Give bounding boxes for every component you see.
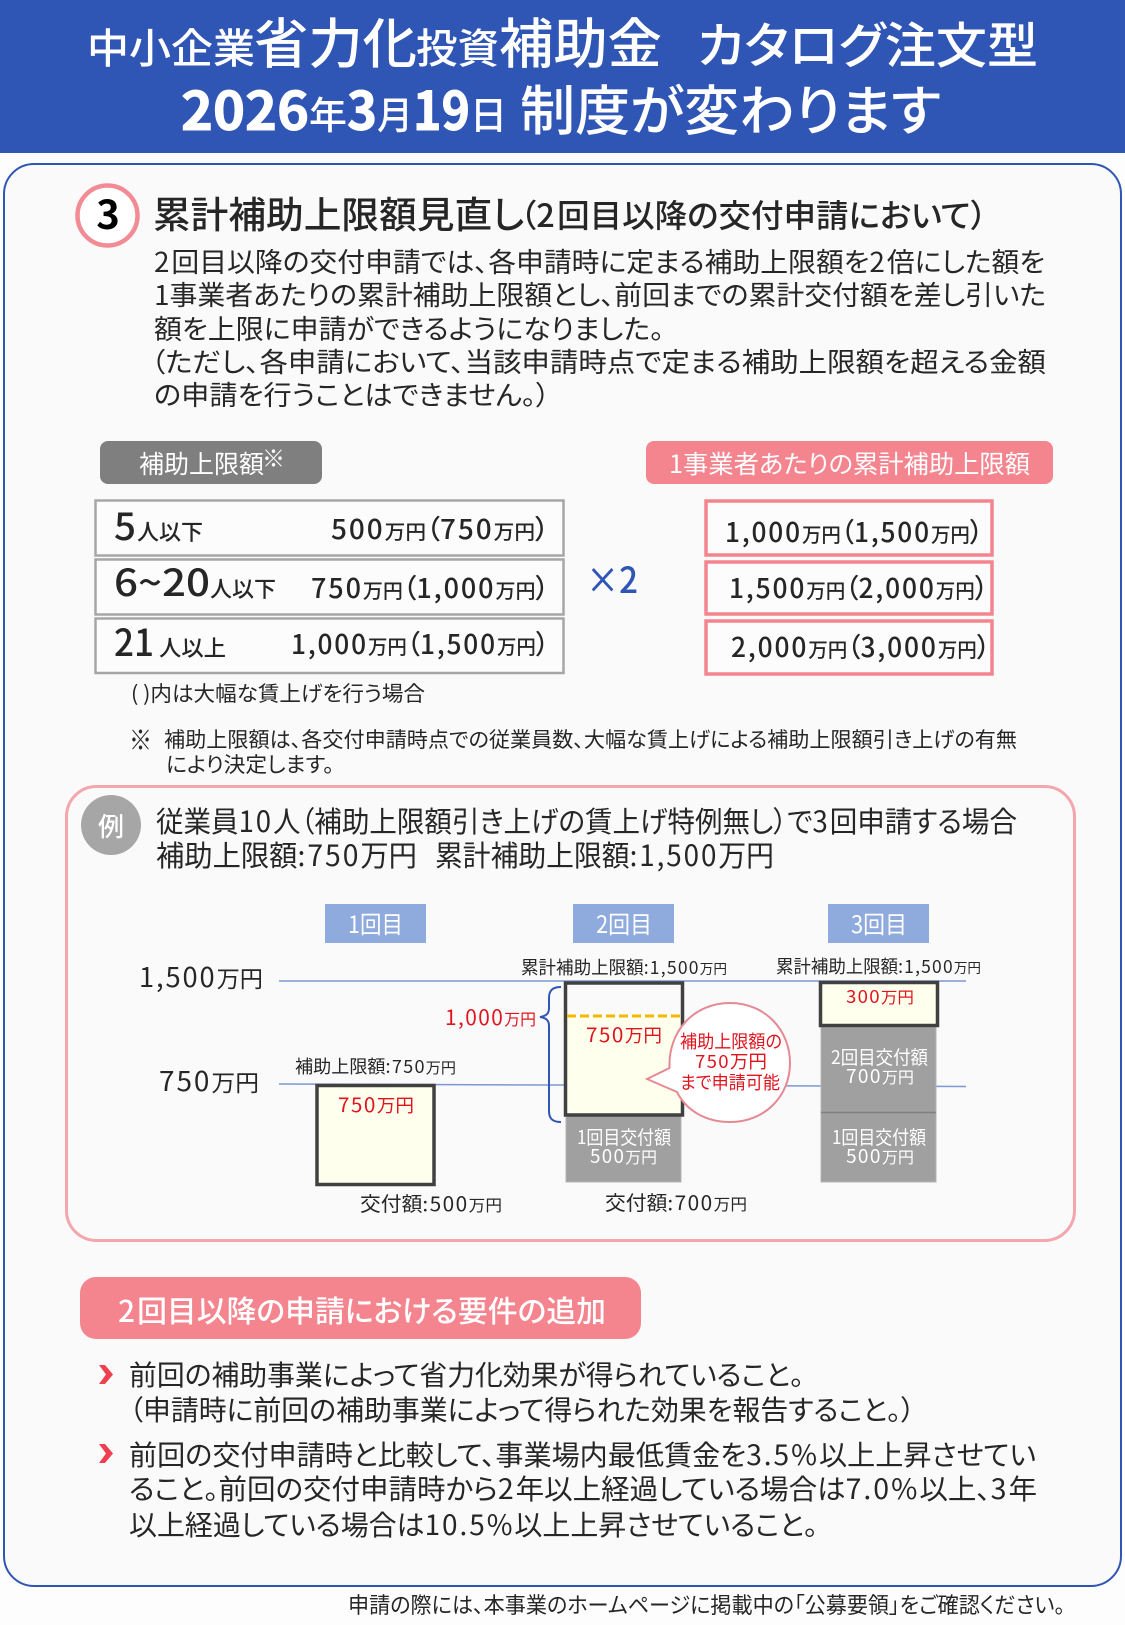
label: subsidy cap: ※ (262, 439, 285, 474)
footnote (129, 719, 1017, 779)
table: cumulative cap: 2,000万円（3,000万円） (731, 626, 990, 665)
row: 6 to 20 people: 750万円（1,000万円） (311, 567, 549, 606)
footer note: 申請の際には、本事業のホームページに掲載中の「公募要領」をご確認ください。 (348, 1588, 1065, 1620)
table: subsidy cap by employees (96, 497, 564, 673)
row: 6 to 20 people: 6~20 (114, 553, 210, 607)
intro text block: 1事業者あたりの累計補助上限額とし、前回までの累計交付額を差し引いた (154, 274, 1046, 313)
round 1 bar: 交付額:500万円 (360, 1188, 502, 1217)
axis label 750: 750万円 (159, 1060, 259, 1099)
icon: example badge (81, 795, 141, 855)
round 2 tag: 2回目 (596, 905, 652, 940)
callout bubble: 補助上限額の (680, 1028, 782, 1054)
round 2 bar: 500万円 (590, 1142, 657, 1169)
example heading: 累計補助上限額:1,500万円 (435, 833, 774, 875)
section number badge: 3 (96, 183, 120, 241)
row: 5 people or fewer: 5 (114, 497, 136, 551)
example heading: 従業員10人（補助上限額引き上げの賃上げ特例無し）で3回申請する場合 (156, 799, 1017, 841)
row: 5 people or fewer: 500万円（750万円） (331, 508, 549, 547)
round 3 bar: 2回目交付額 (831, 1043, 928, 1070)
round 2 tag (573, 904, 674, 943)
title line 2: 年 (309, 85, 347, 140)
requirement 1 (99, 1354, 915, 1429)
requirements heading pill: 2回目以降の申請における要件の追加 (118, 1287, 606, 1331)
round 1 bar (295, 1053, 502, 1217)
callout bubble: 750万円 (695, 1048, 767, 1074)
round 3 bar (776, 953, 981, 1182)
requirements heading pill (80, 1277, 641, 1339)
round 1 tag: 1回目 (348, 905, 403, 940)
chart (139, 904, 981, 1217)
round 2 bar: 1回目交付額 (577, 1123, 671, 1150)
title line 1: 投資 (416, 15, 499, 75)
row: 5 people or fewer: 人以下 (137, 515, 203, 547)
round 2 bar (445, 954, 747, 1216)
section heading (153, 185, 987, 239)
table: cumulative cap (706, 501, 992, 674)
title line 1: 補助金 (499, 0, 662, 79)
row: 21 people or more: 21 (114, 613, 154, 667)
example heading (156, 799, 1017, 875)
requirement 1: 前回の補助事業によって省力化効果が得られていること。 (129, 1354, 804, 1394)
row: 5 people or fewer (114, 497, 549, 551)
title line 2: 3 (347, 70, 377, 146)
round 1 tag (325, 904, 426, 943)
requirement 2: 以上経過している場合は10.5%以上上昇させていること。 (129, 1504, 818, 1544)
intro text block: （ただし、各申請において、当該申請時点で定まる補助上限額を超える金額 (151, 341, 1046, 380)
label: cumulative cap per business: 1事業者あたりの累計補助上限額 (669, 445, 1030, 481)
section heading: 累計補助上限額見直し (153, 185, 524, 239)
brace and 1,000 label: 1,000万円 (445, 1002, 536, 1032)
requirement 2: 前回の交付申請時と比較して、事業場内最低賃金を3.5%以上上昇させてい (129, 1434, 1036, 1474)
callout bubble (647, 1003, 790, 1122)
title line 2 (181, 67, 941, 146)
requirement 2 (99, 1434, 1037, 1544)
panel: example (66, 786, 1074, 1240)
title line 2: 制度が変わります (520, 67, 941, 146)
intro text block: 2回目以降の交付申請では、各申請時に定まる補助上限額を 2倍にした額を (154, 241, 1045, 280)
title line 2: 月 (377, 85, 413, 140)
requirement 2: ること。前回の交付申請時から2年以上経過している場合は7.0%以上、3年 (129, 1468, 1037, 1508)
label: subsidy cap (100, 439, 322, 484)
round 3 bar: 500万円 (846, 1142, 914, 1169)
row: 21 people or more: 人以上 (159, 631, 226, 663)
row: 6 to 20 people: 人以下 (210, 572, 276, 604)
round 1 bar: 補助上限額:750万円 (295, 1053, 456, 1079)
row: 21 people or more (114, 613, 549, 667)
footnote: 補助上限額は、各交付申請時点での従業員数、大幅な賃上げによる補助上限額引き上げの有無 (164, 724, 1017, 754)
round 3 bar: 1回目交付額 (832, 1123, 926, 1150)
round 3 bar: 300万円 (846, 983, 914, 1009)
note: parentheses: ( )内は大幅な賃上げを行う場合 (131, 678, 425, 708)
round 3 tag (828, 904, 929, 943)
axis label 1,500: 1,500万円 (139, 956, 263, 995)
intro text block: 額を上限に申請ができるようになりました。 (154, 308, 664, 347)
title line 1: 省力化 (254, 0, 417, 79)
round 3 bar: 700万円 (846, 1062, 914, 1089)
requirement 1: （申請時に前回の補助事業によって得られた効果を報告すること。） (129, 1389, 915, 1429)
round 3 tag: 3回目 (851, 905, 907, 940)
brace and 1,000 label (445, 987, 561, 1122)
label: subsidy cap: 補助上限額 (139, 445, 264, 481)
round 2 bar: 累計補助上限額:1,500万円 (521, 954, 727, 980)
icon: example badge: 例 (98, 807, 124, 844)
round 3 bar: 累計補助上限額:1,500万円 (776, 953, 981, 979)
table: cumulative cap: 1,000万円（1,500万円） (725, 511, 983, 550)
row: 6 to 20 people (114, 553, 549, 607)
footnote: ※ (129, 719, 152, 758)
intro text block: の申請を行うことはできません。） (154, 374, 550, 413)
icon: chevron (99, 1444, 113, 1463)
title line 2: 日 (470, 85, 507, 140)
table: cumulative cap: 1,500万円（2,000万円） (729, 567, 988, 606)
section heading: （2回目以降の交付申請において） (520, 191, 987, 237)
icon: chevron (99, 1365, 113, 1384)
callout bubble: まで申請可能 (680, 1069, 780, 1095)
row: 21 people or more: 1,000万円（1,500万円） (291, 623, 549, 662)
example heading: 補助上限額:750万円 (156, 833, 417, 875)
title line 2: 2026 (181, 70, 309, 146)
title line 1: カタログ注文型 (697, 7, 1038, 78)
footnote: により決定します。 (166, 749, 334, 779)
section number badge (78, 183, 138, 246)
round 1 bar: 750万円 (338, 1089, 414, 1118)
intro text block (151, 241, 1046, 413)
title line 1 (87, 0, 1038, 79)
round 2 bar: 750万円 (586, 1019, 662, 1048)
title line 2: 19 (413, 70, 470, 146)
round 2 bar: 交付額:700万円 (605, 1187, 747, 1216)
multiplier x2: ×2 (586, 552, 638, 604)
header banner (0, 0, 1125, 153)
title line 1: 中小企業 (87, 15, 255, 75)
